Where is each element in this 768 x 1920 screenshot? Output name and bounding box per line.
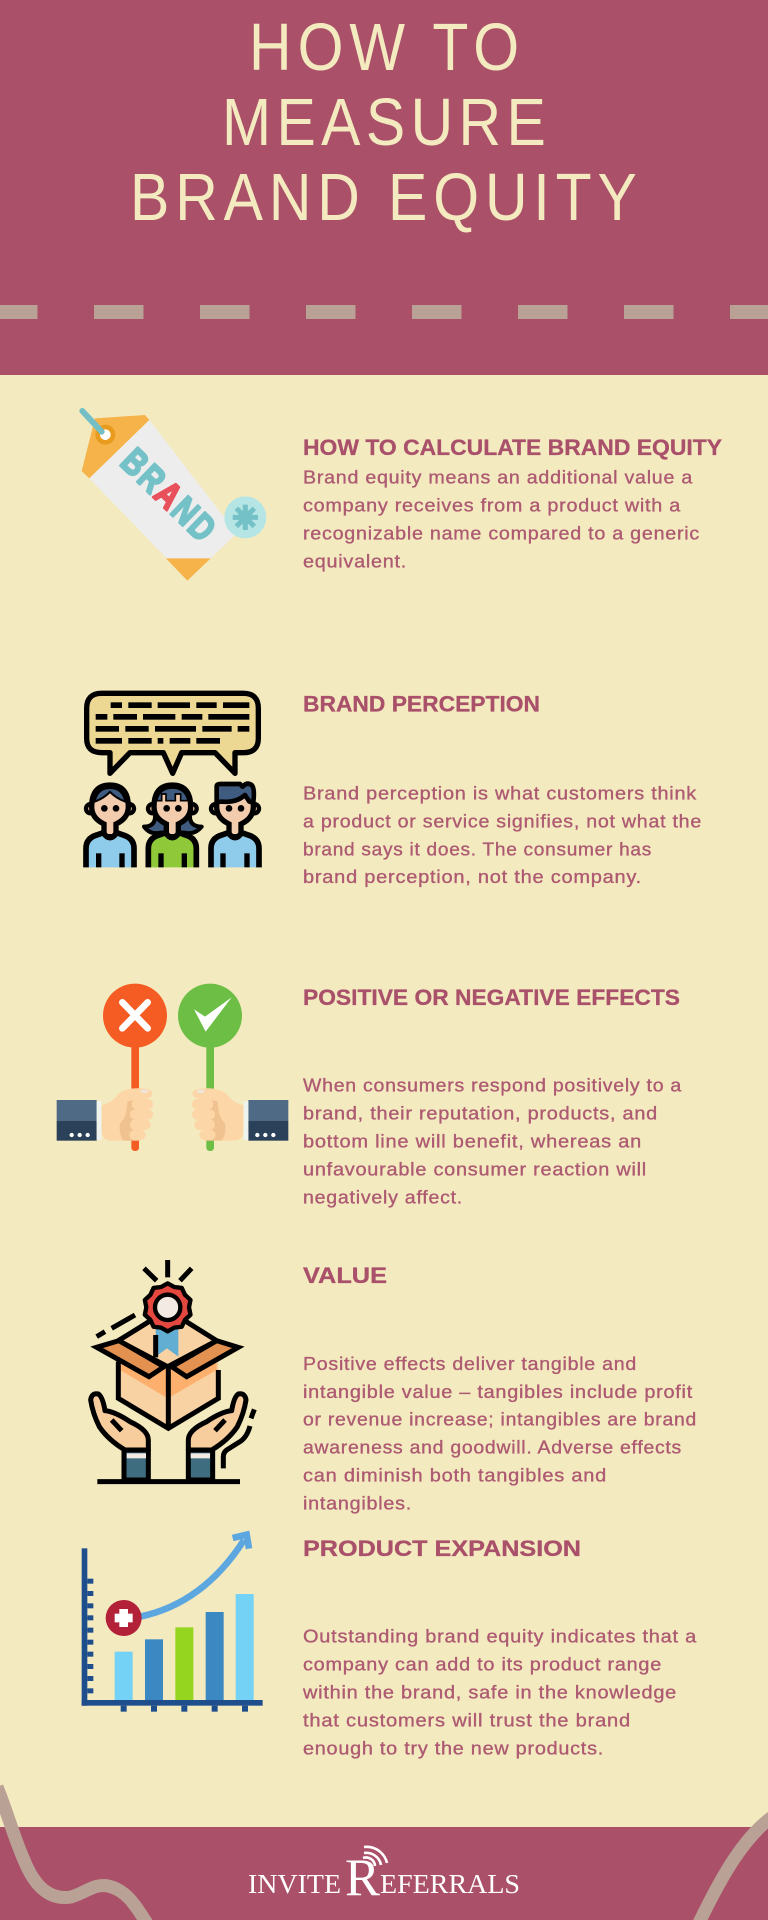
growth arrow bbox=[140, 1535, 249, 1617]
text block: how to calculate: equivalent. bbox=[303, 550, 407, 571]
text block: product expansion: PRODUCT EXPANSION bbox=[303, 1536, 581, 1561]
text block: positive or negative effects: unfavourable consumer reaction will bbox=[303, 1158, 647, 1179]
box bbox=[97, 1310, 238, 1428]
icon: people and speech bubble bbox=[86, 693, 259, 867]
footer panel bbox=[0, 1827, 768, 1920]
icon: yes and no signs bbox=[57, 984, 288, 1151]
text block: value: can diminish both tangibles and bbox=[303, 1465, 607, 1486]
text block: positive or negative effects: When consumers respond positively to a bbox=[303, 1075, 682, 1096]
logo bbox=[248, 1847, 520, 1907]
text block: value: Positive effects deliver tangible and bbox=[303, 1353, 637, 1374]
text block: positive or negative effects: bottom line will benefit, whereas an bbox=[303, 1131, 642, 1152]
text block: how to calculate bbox=[303, 435, 722, 571]
text block: brand perception: brand says it does. The consumer has bbox=[303, 838, 652, 859]
plus badge bbox=[106, 1600, 142, 1636]
header panel bbox=[0, 0, 768, 375]
text block: brand perception: a product or service signifies, not what the bbox=[303, 810, 702, 831]
yes sign bbox=[178, 984, 242, 1151]
axes bbox=[82, 1548, 263, 1712]
right hand bbox=[192, 1088, 288, 1141]
text block: positive or negative effects bbox=[303, 985, 682, 1207]
text block: how to calculate: HOW TO CALCULATE BRAND EQUITY bbox=[303, 435, 722, 460]
left hand bbox=[57, 1088, 153, 1141]
text block: product expansion: within the brand, safe in the knowledge bbox=[302, 1681, 677, 1702]
text block: value bbox=[303, 1263, 697, 1513]
decorative curve: left bbox=[0, 1787, 148, 1920]
text block: value: intangibles. bbox=[303, 1492, 412, 1513]
title bbox=[130, 11, 637, 235]
text block: product expansion: that customers will trust the brand bbox=[303, 1709, 631, 1730]
no sign bbox=[103, 984, 167, 1151]
text block: brand perception: BRAND PERCEPTION bbox=[303, 692, 540, 717]
text block: product expansion: enough to try the new products. bbox=[303, 1737, 604, 1758]
text block: how to calculate: Brand equity means an additional value a bbox=[303, 466, 693, 487]
text block: brand perception: brand perception, not the company. bbox=[303, 866, 642, 887]
text block: product expansion: Outstanding brand equity indicates that a bbox=[303, 1626, 697, 1647]
text block: brand perception: Brand perception is what customers think bbox=[303, 782, 697, 803]
icon: growth bar chart bbox=[82, 1535, 263, 1712]
text block: positive or negative effects: brand, their reputation, products, and bbox=[303, 1103, 658, 1124]
person 2 bbox=[144, 785, 202, 867]
hands bbox=[91, 1394, 246, 1480]
text block: product expansion: company can add to its product range bbox=[303, 1654, 662, 1675]
speech bubble bbox=[87, 693, 258, 773]
title: BRAND EQUITY bbox=[130, 161, 637, 235]
text block: positive or negative effects: POSITIVE OR NEGATIVE EFFECTS bbox=[303, 985, 680, 1010]
icon: gift box with badge and hands bbox=[91, 1260, 254, 1482]
title: MEASURE bbox=[222, 86, 546, 160]
icon: brand tag bbox=[82, 411, 266, 581]
title: HOW TO bbox=[249, 11, 519, 85]
logo: EFERRALS bbox=[380, 1869, 520, 1899]
decorative curve: right bbox=[698, 1815, 768, 1920]
text block: value: intangible value – tangibles include profit bbox=[303, 1381, 693, 1402]
bars bbox=[115, 1594, 254, 1700]
text block: how to calculate: company receives from a product with a bbox=[303, 494, 681, 515]
text block: how to calculate: recognizable name compared to a generic bbox=[303, 522, 700, 543]
logo: INVITE bbox=[248, 1869, 341, 1899]
text block: product expansion bbox=[302, 1536, 697, 1758]
icon: brand tag: BRAND bbox=[113, 440, 226, 551]
text block: value: awareness and goodwill. Adverse effects bbox=[303, 1437, 682, 1458]
text block: brand perception bbox=[303, 692, 702, 887]
text block: value: or revenue increase; intangibles are brand bbox=[303, 1409, 697, 1430]
logo: R bbox=[345, 1849, 381, 1907]
person 1 bbox=[86, 785, 134, 867]
person 3 bbox=[211, 784, 259, 867]
badge bbox=[145, 1283, 190, 1331]
text block: positive or negative effects: negatively affect. bbox=[303, 1186, 463, 1207]
text block: value: VALUE bbox=[303, 1263, 387, 1288]
